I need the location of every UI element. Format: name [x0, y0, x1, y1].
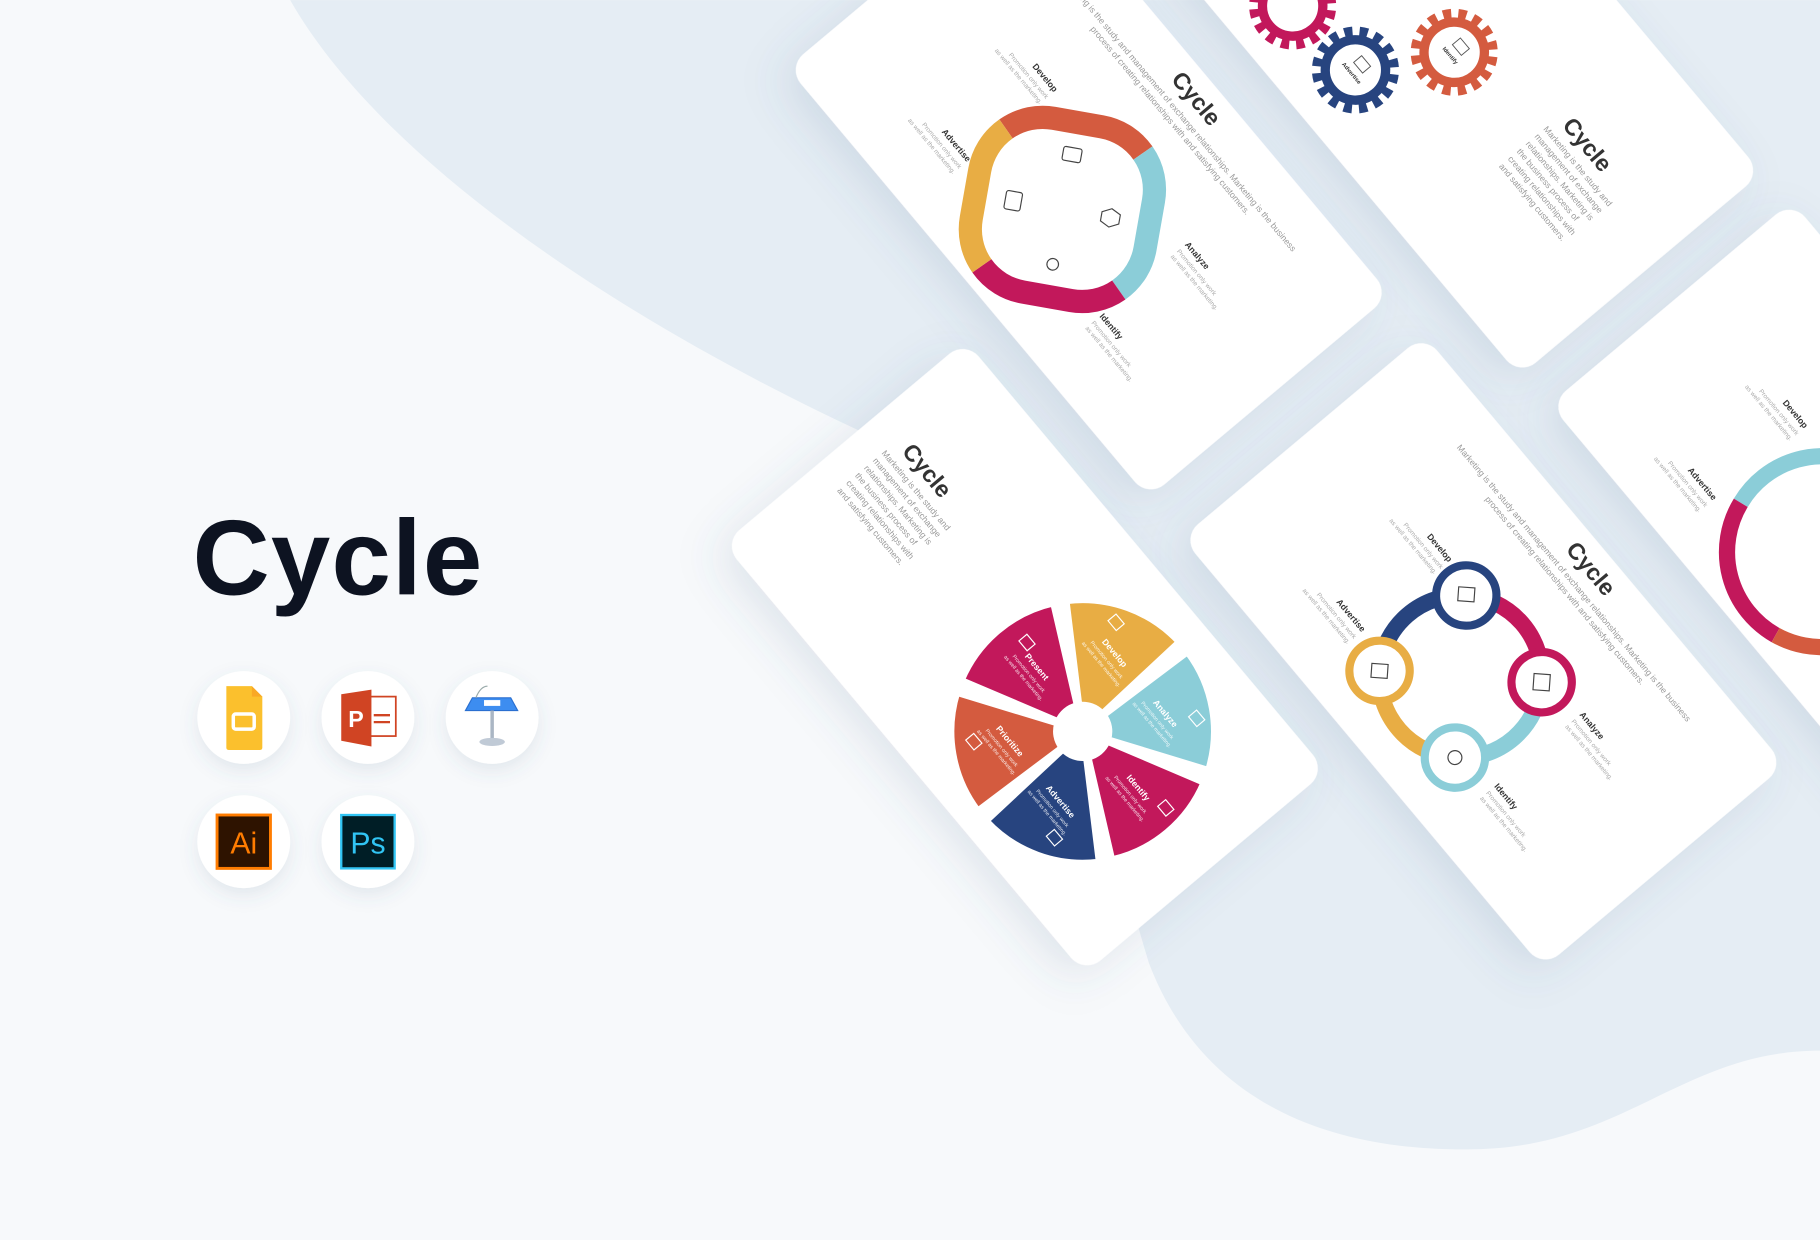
- paragraph: management of exchange: [1533, 132, 1605, 215]
- ring: [1727, 456, 1820, 647]
- card: circle nodes ring slide: Promotion only work: [1570, 718, 1613, 768]
- gear orange: Identify: [1441, 46, 1459, 67]
- pie labels: Present: [1023, 651, 1051, 682]
- icon: keynote: [446, 671, 539, 764]
- card: pie cycle slide: as well as the marketing.: [975, 729, 1017, 777]
- paragraph: management of exchange: [871, 456, 943, 539]
- card: circle nodes ring slide: Promotion only work: [1402, 522, 1445, 571]
- card: pie cycle slide: as well as the marketing.: [1131, 701, 1172, 749]
- card: rounded square ring slide: [784, 0, 1390, 501]
- card: far right ring slide: Promotion only work: [1757, 388, 1800, 437]
- card: circle nodes ring slide: Develop: [1425, 532, 1454, 564]
- card: far right ring slide: Advertise: [1686, 465, 1719, 502]
- gear magenta: [1239, 0, 1347, 60]
- paragraph: process of creating relationships with and satisfying customers.: [1088, 24, 1252, 217]
- paragraph: Marketing is the study and: [1542, 124, 1614, 208]
- card: far right ring slide: Develop: [1781, 398, 1810, 430]
- pie labels: Advertise: [1044, 783, 1077, 820]
- paragraph: the business process of: [853, 471, 920, 547]
- icon: photoshop: [322, 795, 414, 888]
- main title: Cycle: [193, 497, 483, 617]
- paragraph: [1497, 124, 1614, 246]
- pie labels: Prioritize: [994, 724, 1026, 759]
- gear navy: [1301, 16, 1409, 124]
- paragraph: the business process of: [1515, 146, 1582, 223]
- card: circle nodes ring slide: Analyze: [1578, 710, 1607, 741]
- icon: illustrator: [197, 795, 290, 888]
- card: far right ring slide: as well as the marketing.: [1743, 384, 1794, 442]
- pie chart: [889, 539, 1277, 924]
- ring: [960, 107, 1165, 312]
- icon: google slides: [197, 671, 290, 764]
- card: far right ring slide: Promotion only work: [1666, 460, 1709, 509]
- labels left: Promotion only work: [1007, 52, 1050, 101]
- card: pie cycle slide: Promotion only work: [984, 728, 1019, 769]
- paragraph: Marketing is the study and: [880, 448, 953, 533]
- card: circle nodes ring slide: Promotion only work: [1484, 790, 1527, 839]
- labels left: [906, 32, 1060, 178]
- card: gears slide: [1159, 0, 1762, 376]
- ring with nodes: [1342, 558, 1580, 795]
- card: circle nodes ring slide: as well as the marketing.: [1478, 795, 1529, 854]
- paragraph: relationships. Marketing is: [1524, 139, 1596, 223]
- card: pie cycle slide: as well as the marketing.: [1080, 641, 1122, 689]
- icon: photoshop: Ps: [350, 827, 386, 860]
- card: far right ring slide: as well as the marketing.: [1652, 456, 1703, 514]
- labels left: Promotion only work: [920, 122, 963, 171]
- labels right: [1083, 240, 1236, 384]
- paragraph: and satisfying customers.: [1497, 161, 1568, 243]
- card: circle nodes ring slide: Identify: [1492, 781, 1520, 812]
- paragraph: creating relationships with: [1506, 154, 1578, 237]
- card: circle nodes ring slide: as well as the marketing.: [1563, 724, 1614, 782]
- card: pie cycle slide: as well as the marketing.: [1026, 789, 1067, 837]
- pie labels: [970, 607, 1205, 847]
- labels right: as well as the marketing.: [1083, 325, 1134, 384]
- paragraph: relationships. Marketing is: [862, 463, 935, 547]
- gear navy: Advertise: [1340, 62, 1362, 86]
- card: pie cycle slide: [723, 340, 1326, 974]
- labels right: Analyze: [1183, 240, 1212, 271]
- labels left: as well as the marketing.: [906, 117, 957, 176]
- card: far right ring slide: [1534, 201, 1820, 848]
- pie labels: Identify: [1125, 773, 1152, 803]
- card: pie cycle slide: Promotion only work: [1011, 654, 1046, 694]
- pie labels: Develop: [1100, 637, 1129, 669]
- card: pie cycle slide: as well as the marketing.: [1002, 655, 1044, 702]
- paragraph: and satisfying customers.: [835, 486, 906, 567]
- labels right: Promotion only work: [1090, 320, 1133, 369]
- labels left: Advertise: [940, 127, 973, 164]
- card: pie cycle slide: as well as the marketing.: [1104, 776, 1145, 823]
- labels right: as well as the marketing.: [1169, 254, 1219, 312]
- labels left: as well as the marketing.: [993, 47, 1043, 106]
- card: circle nodes ring slide: as well as the marketing.: [1387, 518, 1438, 576]
- background blob: [290, 0, 1820, 1149]
- paragraph: Marketing is the study and management of exchange relationships. Marketing is the business: [1455, 443, 1693, 724]
- title: Cycle: [1167, 66, 1226, 131]
- labels right: Identify: [1098, 311, 1125, 342]
- icon: powerpoint: [322, 671, 414, 764]
- paragraph: creating relationships with: [844, 478, 916, 561]
- card: pie cycle slide: Promotion only work: [1034, 789, 1070, 829]
- paragraph: [835, 448, 953, 570]
- card: circle nodes ring slide: Promotion only work: [1315, 592, 1358, 641]
- title: Cycle: [897, 438, 957, 503]
- pie labels: Analyze: [1151, 698, 1180, 729]
- icon: illustrator: Ai: [230, 827, 257, 860]
- gear orange: [1400, 0, 1508, 106]
- card: pie cycle slide: Promotion only work: [1089, 640, 1124, 681]
- card: circle nodes ring slide: Advertise: [1334, 597, 1368, 634]
- card: pie cycle slide: Promotion only work: [1139, 701, 1175, 741]
- card: circle nodes ring slide: [1156, 335, 1785, 989]
- card: circle nodes ring slide: as well as the marketing.: [1301, 587, 1351, 646]
- icon: powerpoint: P: [348, 706, 364, 732]
- title: Cycle: [1561, 536, 1621, 601]
- labels left: Develop: [1030, 61, 1060, 94]
- title: Cycle: [1558, 112, 1617, 177]
- paragraph: process of creating relationships with and satisfying customers.: [1483, 494, 1647, 687]
- labels right: Promotion only work: [1175, 248, 1218, 298]
- card: pie cycle slide: Promotion only work: [1112, 775, 1147, 815]
